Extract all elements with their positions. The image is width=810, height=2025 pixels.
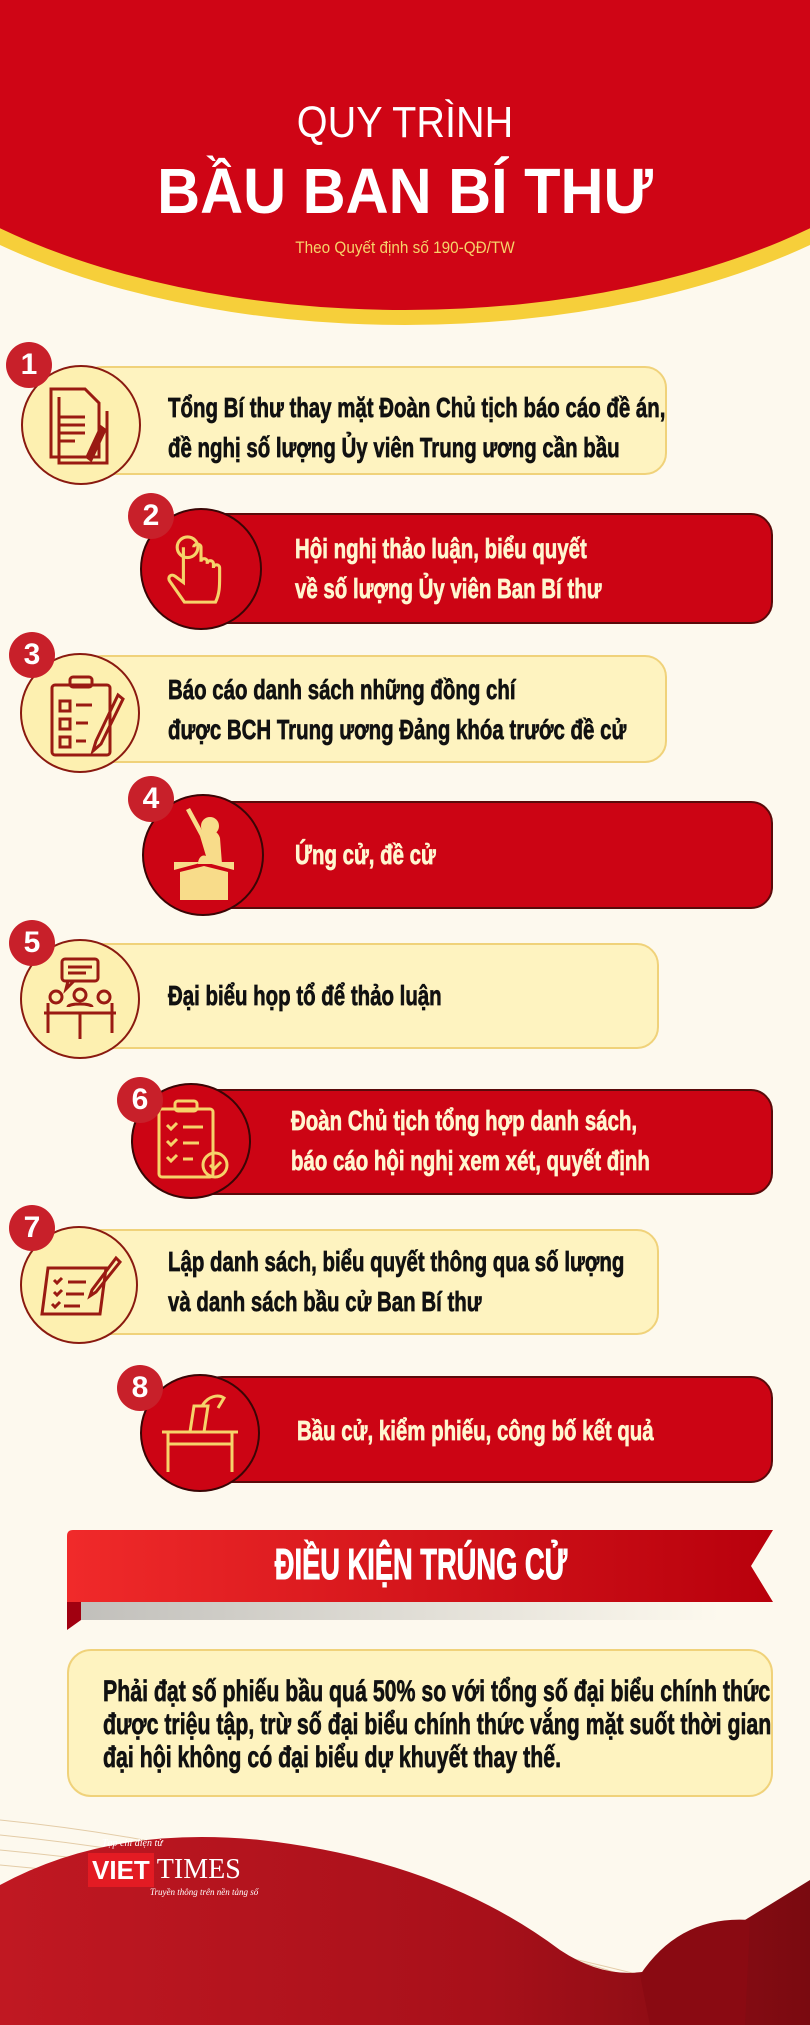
- step 7: [9, 1205, 659, 1344]
- text 4: Ứng cử, đề cử: [295, 839, 436, 870]
- title: QUY TRÌNH: [297, 98, 513, 147]
- badge 1: [6, 342, 52, 388]
- badge 2: 2: [143, 499, 159, 532]
- conditions text: được triệu tập, trừ số đại biểu chính thức vắng mặt suốt thời gian: [103, 1708, 771, 1741]
- badge 4: [128, 776, 174, 822]
- badge 6: [117, 1077, 163, 1123]
- step 8: [117, 1365, 773, 1492]
- logo: TIMES: [157, 1854, 241, 1885]
- badge 7: 7: [24, 1211, 40, 1244]
- icon: hand tap: [140, 508, 262, 630]
- badge 1: 1: [21, 348, 37, 381]
- conditions box: [67, 1649, 773, 1797]
- title: [157, 98, 653, 227]
- icon: meeting: [20, 939, 140, 1059]
- badge 8: [117, 1365, 163, 1411]
- text 2: về số lượng Ủy viên Ban Bí thư: [295, 573, 602, 604]
- badge 5: 5: [24, 926, 40, 959]
- bottom decoration: [0, 1820, 810, 2025]
- text 7: Lập danh sách, biểu quyết thông qua số lượng: [168, 1246, 624, 1277]
- subtitle: Theo Quyết định số 190-QĐ/TW: [295, 238, 515, 257]
- step 6: [117, 1077, 773, 1199]
- step 1: [6, 342, 667, 485]
- text 1: [168, 392, 665, 464]
- text 7: và danh sách bầu cử Ban Bí thư: [168, 1286, 482, 1317]
- badge 8: 8: [132, 1371, 148, 1404]
- text 2: [294, 533, 602, 604]
- step 4: [128, 776, 773, 916]
- icon: checklist: [20, 653, 140, 773]
- badge 5: [9, 920, 55, 966]
- logo: Truyền thông trên nền tảng số: [150, 1887, 258, 1897]
- conditions text: Phải đạt số phiếu bầu quá 50% so với tổng số đại biểu chính thức: [103, 1675, 770, 1708]
- text 3: [168, 674, 627, 746]
- text 6: [290, 1105, 650, 1176]
- text 1: đề nghị số lượng Ủy viên Trung ương cần bầu: [168, 432, 620, 463]
- logo: Tạp chí điện tử: [102, 1838, 163, 1849]
- badge 3: 3: [24, 638, 40, 671]
- step 2: [128, 493, 773, 630]
- text 6: Đoàn Chủ tịch tổng hợp danh sách,: [291, 1105, 637, 1136]
- icon: clipboard gear: [131, 1083, 251, 1199]
- text 2: Hội nghị thảo luận, biểu quyết: [295, 533, 587, 564]
- text 6: báo cáo hội nghị xem xét, quyết định: [291, 1145, 650, 1176]
- logo: [88, 1838, 259, 1897]
- icon: ballot list: [20, 1226, 138, 1344]
- ribbon title: ĐIỀU KIỆN TRÚNG CỬ: [275, 1540, 567, 1589]
- badge 7: [9, 1205, 55, 1251]
- header background: [0, 0, 810, 325]
- text 7: [168, 1246, 624, 1317]
- badge 6: 6: [132, 1083, 148, 1116]
- icon: ballot box: [140, 1374, 260, 1492]
- icon: podium: [142, 794, 264, 916]
- conditions text: [103, 1675, 771, 1774]
- badge 3: [9, 632, 55, 678]
- logo: VIET: [92, 1855, 150, 1885]
- text 3: Báo cáo danh sách những đồng chí: [168, 674, 516, 705]
- title: BẦU BAN BÍ THƯ: [157, 155, 653, 227]
- text 1: Tổng Bí thư thay mặt Đoàn Chủ tịch báo cáo đề án,: [168, 392, 665, 423]
- icon: document: [21, 365, 141, 485]
- text 3: được BCH Trung ương Đảng khóa trước đề cử: [168, 714, 626, 745]
- step 3: [9, 632, 667, 773]
- text 5: Đại biểu họp tổ để thảo luận: [168, 980, 442, 1011]
- text 8: Bầu cử, kiểm phiếu, công bố kết quả: [297, 1415, 654, 1446]
- badge 4: 4: [143, 782, 159, 815]
- step 5: [9, 920, 659, 1059]
- ribbon heading: [67, 1530, 773, 1630]
- conditions text: đại hội không có đại biểu dự khuyết thay thế.: [103, 1741, 561, 1774]
- badge 2: [128, 493, 174, 539]
